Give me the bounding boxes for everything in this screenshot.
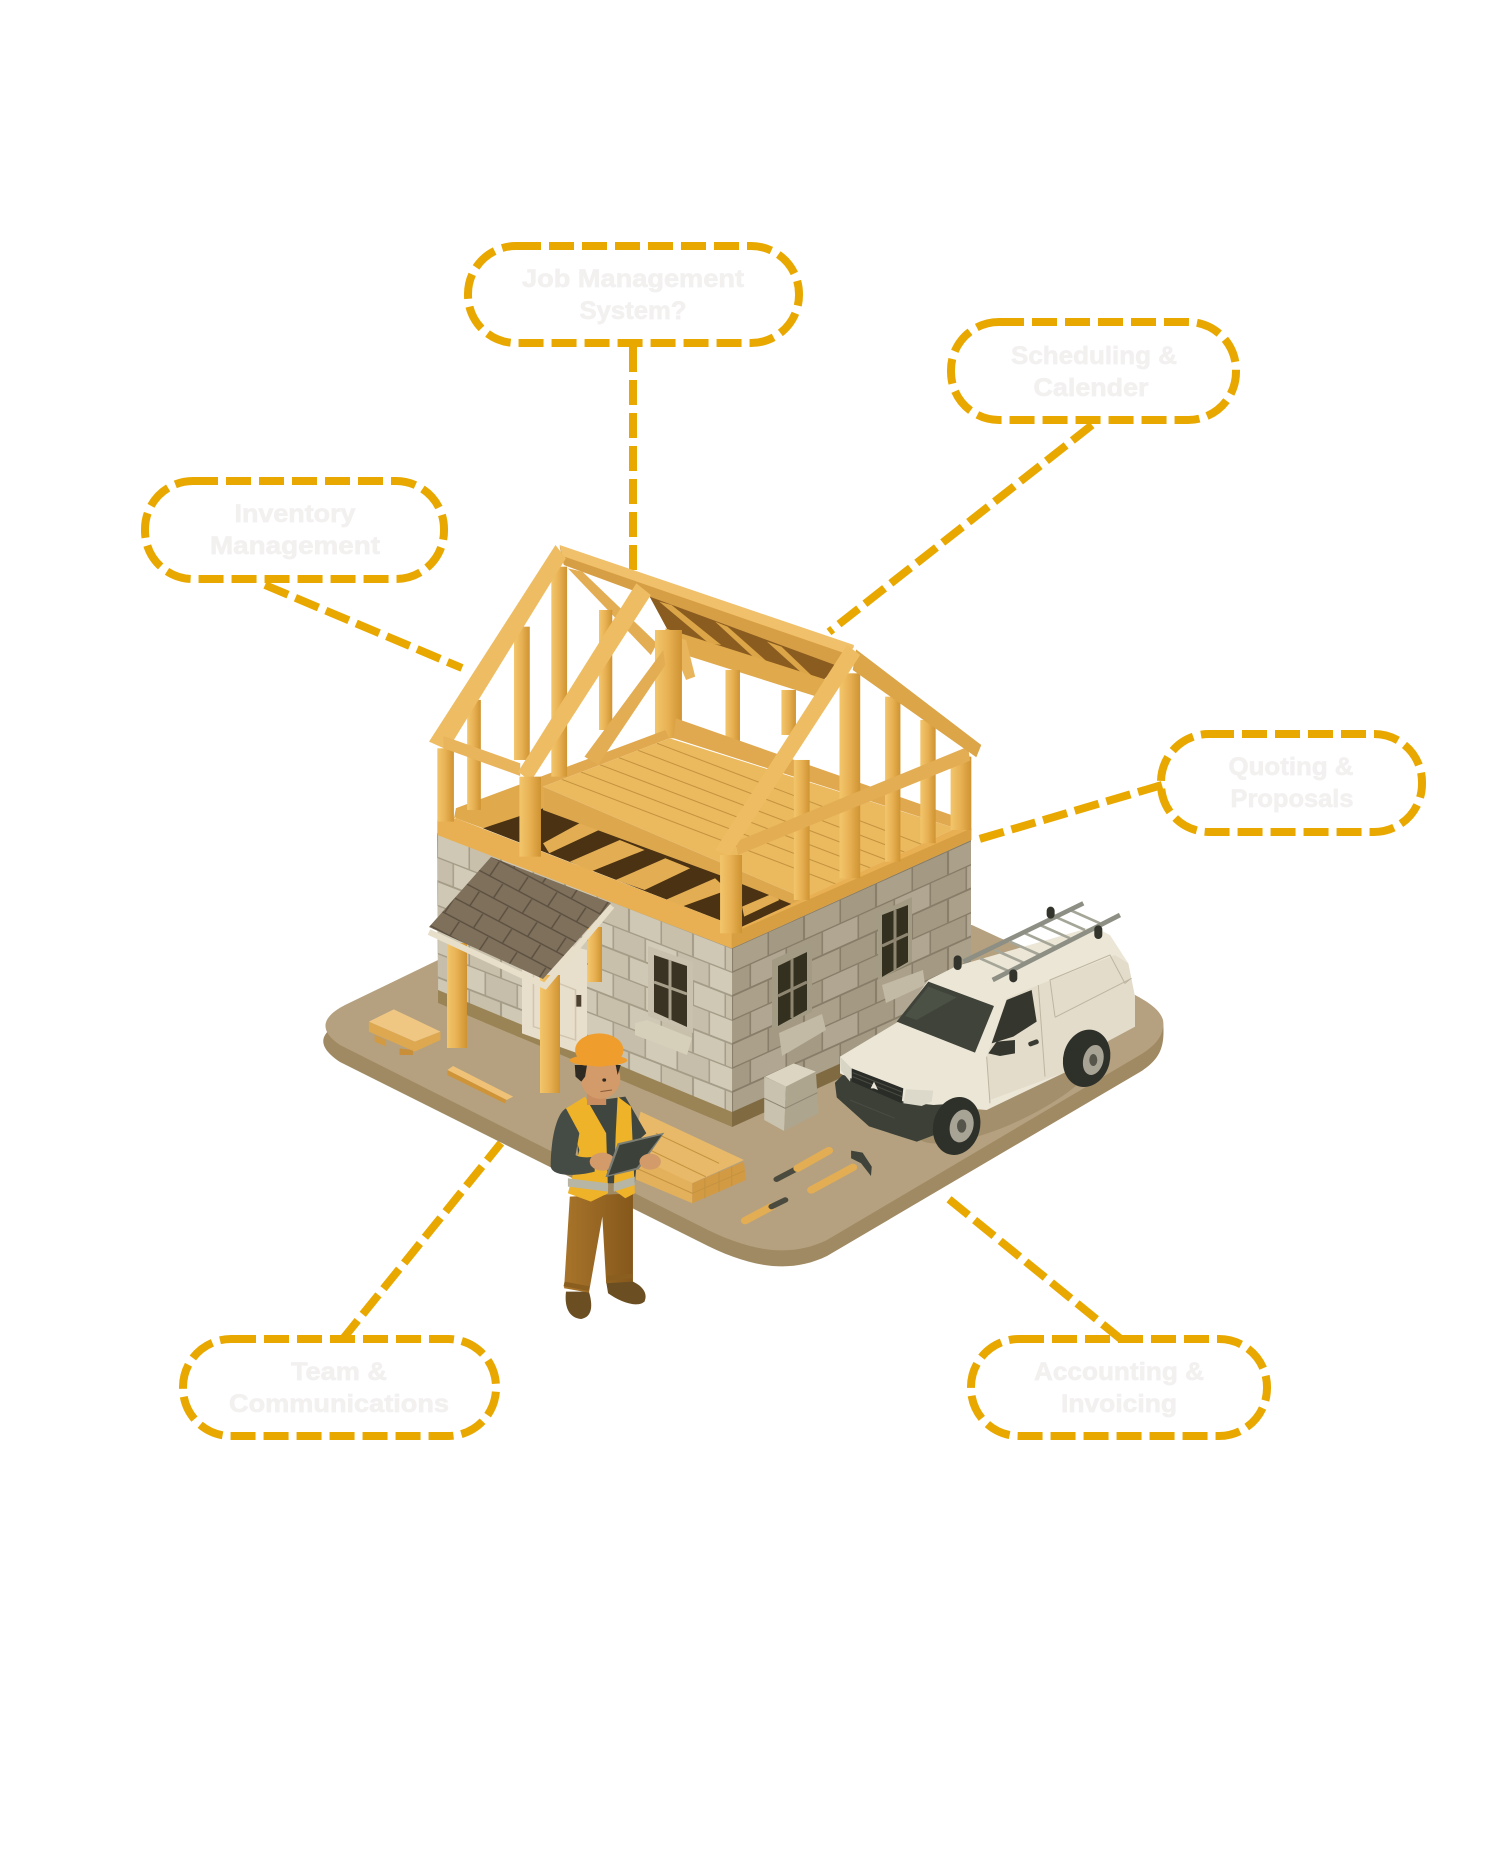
callout: team and communications: Team & bbox=[291, 1358, 387, 1386]
callout: quoting and proposals: Proposals bbox=[1230, 785, 1354, 813]
callout: quoting and proposals bbox=[1161, 734, 1422, 832]
windows bbox=[635, 897, 925, 1056]
callout: scheduling and calendar: Scheduling & bbox=[1011, 342, 1177, 370]
callout: job management system: Job Management bbox=[522, 265, 745, 293]
tools bbox=[745, 1151, 872, 1221]
hard hat bbox=[570, 1033, 627, 1067]
trousers bbox=[564, 1193, 633, 1293]
callout: accounting and invoicing bbox=[971, 1339, 1267, 1436]
house back framing bbox=[454, 545, 956, 828]
lumber stack bbox=[629, 1112, 746, 1203]
connector: scheduling bbox=[829, 425, 1092, 632]
small lumber and block props bbox=[369, 1009, 819, 1131]
bumper and grille bbox=[837, 1057, 943, 1140]
floor joists and deck bbox=[437, 738, 989, 948]
arm bbox=[551, 1108, 595, 1175]
callout: accounting and invoicing: Invoicing bbox=[1061, 1390, 1177, 1418]
callout: team and communications bbox=[183, 1339, 496, 1436]
callout: team and communications: Communications bbox=[229, 1390, 449, 1418]
house timber frame bbox=[429, 545, 981, 933]
shirt bbox=[576, 1097, 646, 1183]
door bbox=[522, 933, 587, 1057]
windshield bbox=[897, 982, 994, 1053]
stone walls bbox=[437, 833, 971, 1127]
porch posts bbox=[447, 927, 602, 1093]
head bbox=[575, 1058, 621, 1105]
boots bbox=[566, 1280, 646, 1319]
connector: job management bbox=[629, 347, 637, 572]
hands and tablet bbox=[590, 1133, 664, 1177]
platform base bbox=[323, 925, 1164, 1266]
callout: inventory management: Inventory bbox=[234, 500, 356, 528]
hi-vis vest bbox=[566, 1097, 635, 1202]
callout: accounting and invoicing: Accounting & bbox=[1034, 1358, 1204, 1386]
roof ladder bbox=[958, 903, 1120, 980]
construction worker bbox=[551, 1033, 664, 1319]
callout: quoting and proposals: Quoting & bbox=[1228, 753, 1354, 781]
shingle roof bbox=[429, 857, 612, 986]
side window and mirror bbox=[988, 990, 1039, 1056]
callout: job management system: System? bbox=[580, 297, 686, 325]
callout: inventory management: Management bbox=[210, 532, 381, 560]
connector: quoting bbox=[976, 785, 1162, 840]
callout: scheduling and calendar bbox=[951, 322, 1236, 420]
connector: inventory bbox=[265, 585, 462, 668]
connector: team bbox=[342, 1143, 501, 1340]
callout: scheduling and calendar: Calender bbox=[1034, 374, 1149, 402]
white van with roof ladder bbox=[837, 903, 1135, 1163]
porch bbox=[429, 857, 612, 1093]
callout: job management system bbox=[468, 246, 799, 343]
wheels bbox=[927, 1024, 1117, 1160]
van body bbox=[840, 927, 1135, 1110]
callout: inventory management bbox=[145, 481, 444, 579]
illustration: construction site bbox=[323, 545, 1164, 1319]
connector: accounting bbox=[945, 1196, 1122, 1340]
